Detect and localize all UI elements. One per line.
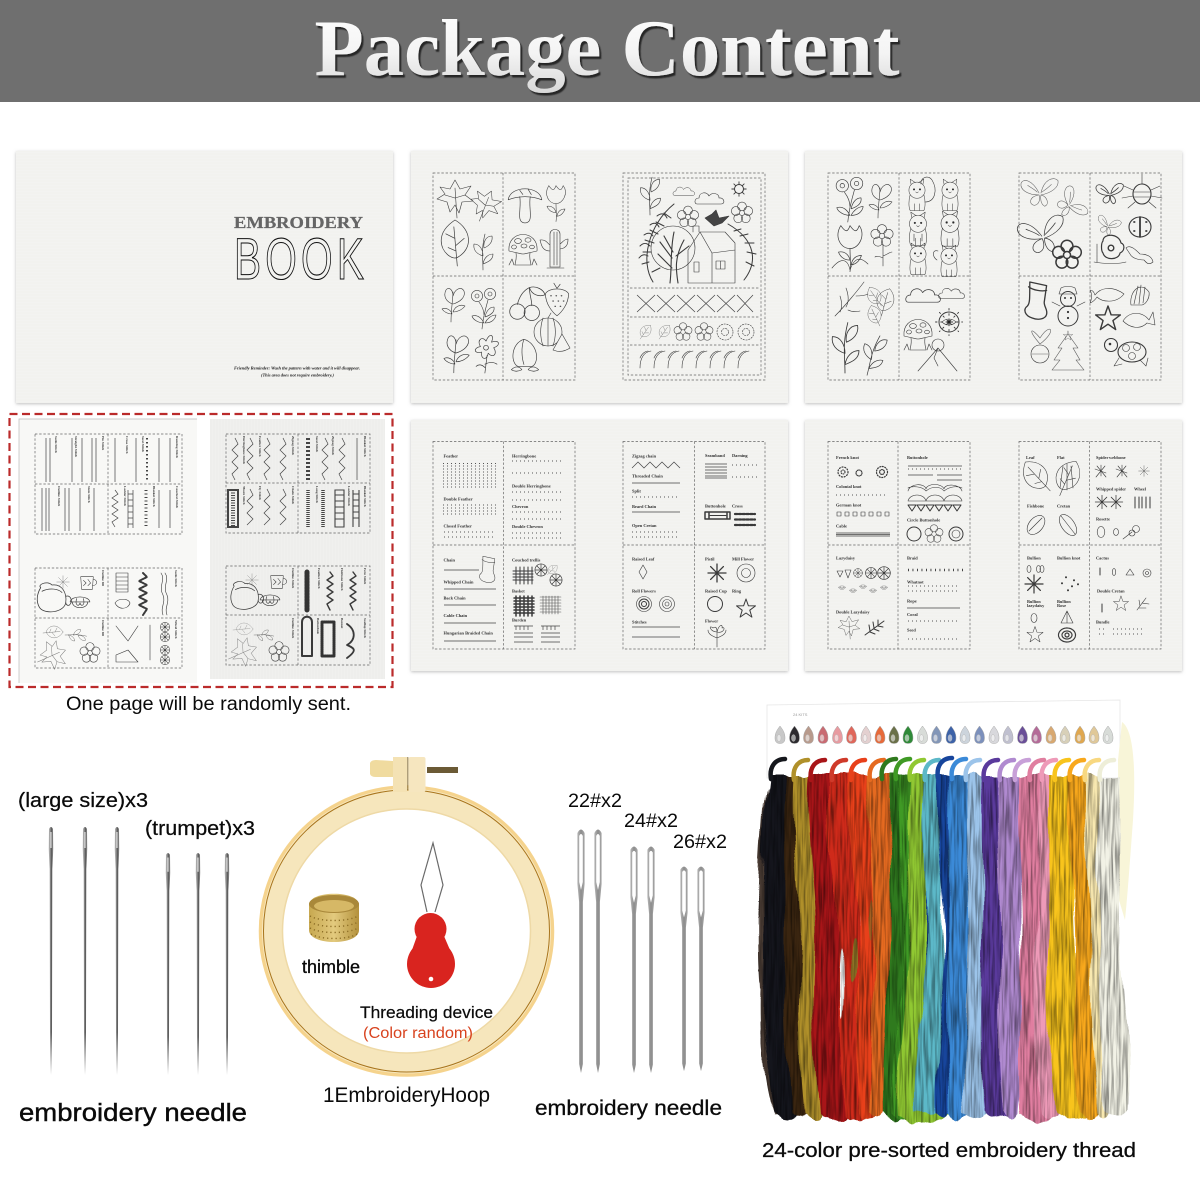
label: embroidery needle: embroidery needle	[535, 1097, 722, 1120]
rotated stitch labels: Fern Stitch	[363, 568, 367, 584]
scene: tree, house and wreath	[639, 177, 756, 283]
title: Package Content	[314, 3, 900, 93]
stitch labels: Chevron	[512, 504, 529, 509]
rotated stitch labels: Ladder Stitch	[123, 486, 127, 506]
leaves, mushrooms, flowers and fruit outlines	[437, 180, 570, 373]
stitch labels: Cable Chain	[444, 613, 468, 618]
rotated stitch labels: Wheel Stitch	[174, 620, 178, 639]
stitch labels: Cable	[836, 524, 847, 528]
label: size 26: 26#x2	[673, 832, 727, 853]
panel: feather, chain and trellis stitches	[411, 420, 788, 671]
stitch labels: Lazydaisy	[836, 556, 856, 560]
flowers, pets and landscape outlines	[832, 177, 965, 378]
stitch labels: Herringbone	[512, 454, 536, 458]
label: size 22: 22#x2	[568, 791, 622, 812]
rotated stitch labels: Cross Stitch	[125, 436, 129, 454]
stitch labels	[836, 455, 1147, 632]
stitch labels: Wheel	[1134, 486, 1147, 492]
stitch labels: Back Chain	[444, 596, 466, 600]
label: thread: 24-color pre-sorted embroidery thread	[762, 1139, 1136, 1162]
stitch dot rows	[443, 461, 758, 538]
rotated stitch labels: Outline Stitch	[291, 618, 295, 638]
caption: one page will be randomly sent: One page will be randomly sent.	[66, 694, 351, 715]
label: size 24: 24#x2	[624, 811, 678, 832]
rotated stitch labels: Zigzag Stitch	[331, 436, 335, 455]
stitch labels: Flat	[1057, 455, 1065, 460]
cover reminder text: Friendly Reminder: Wash the pattern with water and it will disappear.	[234, 366, 360, 370]
stitch labels: Bullion	[1027, 599, 1041, 604]
color card: 24 KITS	[793, 712, 808, 717]
stitch labels: Stitches	[632, 620, 647, 624]
stitch labels: Darning	[732, 453, 748, 458]
rotated stitch labels: Long Stitch	[315, 486, 319, 503]
stitch labels: German knot	[836, 502, 862, 508]
rotated stitch labels: Chain Stitch	[291, 486, 295, 504]
needles: right group	[577, 830, 705, 1073]
stitch labels: Coral	[907, 612, 919, 617]
rotated stitch labels: Fishbone Stitch	[340, 568, 344, 591]
rotated stitch labels: Satin Stitch	[174, 570, 178, 587]
cover heading: book: BOOK	[234, 227, 368, 292]
stitch labels: Bullion	[1027, 556, 1041, 560]
rotated stitch labels: Seed Stitch	[315, 436, 319, 452]
stitch labels: Leaf	[1026, 455, 1035, 460]
stitch labels: Double Lazydaisy	[836, 610, 870, 614]
thread bundles	[759, 775, 1129, 1123]
stitch labels: Double Cretan	[1097, 588, 1125, 594]
stitch labels: French knot	[836, 455, 860, 460]
stitch labels: Buttonhole	[907, 455, 928, 460]
label: trumpet: (trumpet)x3	[145, 817, 255, 840]
stitch labels: Double Chevron	[512, 524, 543, 529]
stitch labels: Flower	[705, 618, 718, 624]
label: color random: (Color random)	[363, 1025, 473, 1042]
stitch labels: Whatnot	[907, 580, 924, 584]
stitch labels: Feather	[444, 454, 458, 458]
stitch labels: Basket	[512, 588, 525, 594]
rotated stitch labels: Feather Stitch	[258, 436, 262, 457]
rotated stitch labels: Blanket Stitch	[363, 436, 367, 457]
stitch labels: Seed	[907, 628, 916, 632]
stitch labels: Colonial knot	[836, 484, 862, 489]
stitch labels: Closed Feather	[444, 524, 472, 528]
rotated stitch labels: Bonnet	[340, 618, 344, 629]
hoop ring	[260, 787, 552, 1075]
rotated stitch labels	[54, 436, 367, 639]
rotated stitch labels: Running Stitch	[175, 436, 179, 458]
rotated stitch labels: Satin Stitch	[54, 436, 58, 453]
stitch labels: Fishbone	[1027, 504, 1044, 508]
panel: animal and insect patterns	[805, 151, 1182, 403]
rotated stitch labels: Outline Stitch	[291, 568, 295, 588]
panel: sized needles	[535, 791, 727, 1120]
hoop clasp and screw	[370, 757, 458, 792]
panel: book cover	[16, 151, 393, 403]
panel: floral and nature patterns	[411, 151, 788, 403]
chevron stitch row	[640, 351, 749, 368]
stitch labels: Raised Leaf	[632, 556, 655, 562]
stitch labels: Roll Flowers	[632, 588, 656, 594]
stitch labels: Bullion knot	[1057, 556, 1081, 560]
stitch labels: Braid	[907, 556, 918, 560]
rotated stitch labels: Ladder Stitch	[347, 486, 351, 506]
stitch labels: Mill Flower	[732, 556, 754, 562]
panel: embroidery hoop with thimble and threader	[260, 757, 552, 1107]
stitch labels: Split	[632, 488, 641, 494]
stitch labels: Whipped spider	[1096, 486, 1126, 492]
rotated stitch labels: Outline Stitch	[57, 486, 61, 506]
cross-stitch row	[637, 295, 753, 312]
header band	[0, 0, 1200, 102]
rotated stitch labels: Straight Stitch	[74, 436, 78, 457]
rotated stitch labels: Zigzag Stitch	[291, 436, 295, 455]
panel: 24-color thread	[759, 700, 1136, 1162]
stitch labels: Open Cretan	[632, 523, 657, 528]
label: threading device: Threading device	[360, 1004, 493, 1022]
rotated stitch labels: Buttonhole	[316, 618, 320, 635]
stitch labels: Cretan	[1057, 504, 1071, 508]
stitch labels: Spider	[1096, 455, 1108, 460]
stitch labels: Zigzag chain	[632, 454, 657, 458]
stitch rows	[836, 469, 1145, 639]
label: hoop: 1EmbroideryHoop	[323, 1084, 490, 1107]
stitch labels: Buttonhole	[705, 504, 726, 508]
stitch diagrams and small motifs	[479, 512, 756, 647]
insects, holiday and sea creature outlines	[1016, 174, 1162, 370]
stitch labels: Threaded Chain	[632, 474, 663, 478]
stitch labels: Raised Cup	[705, 588, 727, 594]
cover reminder text	[234, 366, 360, 378]
cover heading: embroidery: EMBROIDERY	[234, 213, 363, 232]
stitch labels: Double Herringbone	[512, 484, 551, 488]
stitch labels: Double Feather	[444, 496, 473, 502]
color card	[767, 700, 1134, 920]
panel: knot, buttonhole, leaf and spider stitches	[805, 420, 1182, 671]
stitch labels: Pistil	[705, 556, 715, 562]
panel: embroidery needles large and trumpet	[18, 789, 255, 1127]
rotated stitch labels: Couched Stitch	[175, 486, 179, 508]
left page stitch diagrams	[42, 438, 170, 531]
rotated stitch labels: Scallop Stitch	[363, 618, 367, 638]
color swatch drops	[775, 726, 1113, 744]
stitch labels: Bullion	[1057, 599, 1071, 604]
stitch labels: webbone	[1109, 455, 1126, 460]
stitch labels: Beard Chain	[632, 504, 657, 509]
stitch labels: Chain	[444, 558, 456, 562]
stitch labels: lazydaisy	[1027, 603, 1045, 608]
stitch labels: Ring	[732, 588, 742, 594]
stitch labels: Circle Buttonhole	[907, 518, 940, 522]
stitch labels: Rope	[907, 598, 917, 604]
stitch labels: Hungarian Braided Chain	[444, 630, 493, 636]
label: large size: (large size)x3	[18, 789, 148, 812]
panel: randomly sent page (dashed red frame)	[10, 414, 392, 687]
label: thimble: thimble	[302, 957, 360, 977]
stitch labels: Couched trellis	[512, 558, 541, 562]
right page stitch diagrams	[228, 438, 359, 527]
thread hooks over card	[771, 758, 1114, 780]
cover reminder text: (This area does not require embroidery.)	[261, 372, 334, 378]
threading device	[407, 843, 455, 988]
leaf, flower and ring row	[636, 322, 754, 342]
rotated stitch labels: Blanket Stitch	[363, 486, 367, 507]
rotated stitch labels: Blanket Stitch	[152, 486, 156, 507]
stitch labels: Cross	[732, 504, 743, 508]
stitch labels: Rose	[1057, 603, 1066, 608]
rotated stitch labels: Herringbone Stitch	[242, 436, 246, 464]
rotated stitch labels: Feather Stitch	[317, 568, 321, 589]
stitch line rows	[444, 462, 727, 642]
stitch labels: Cactus	[1096, 556, 1109, 560]
stitch labels: Bundle	[1096, 620, 1109, 624]
rotated stitch labels: Fly Stitch	[258, 486, 262, 500]
stitch labels: Burden	[512, 618, 527, 622]
stitch labels: Seamband	[705, 453, 725, 458]
stitch labels: Whipped Chain	[444, 580, 474, 584]
rotated stitch labels: Outline fill	[101, 620, 105, 636]
rotated stitch labels: Stem Stitch	[87, 486, 91, 503]
stitch labels	[444, 453, 754, 636]
rotated stitch labels: Thorn Stitch	[242, 486, 246, 505]
rotated stitch labels: Pin Stitch	[101, 436, 105, 450]
needles: left group	[49, 827, 229, 1075]
stitch labels: Rosette	[1096, 516, 1110, 522]
rotated stitch labels: Seed Stitch	[141, 436, 145, 452]
label: embroidery needle: embroidery needle	[19, 1099, 247, 1127]
thimble	[309, 894, 359, 942]
rotated stitch labels: Outline fill	[101, 570, 105, 586]
stitch diagrams and small motifs	[837, 455, 1151, 642]
